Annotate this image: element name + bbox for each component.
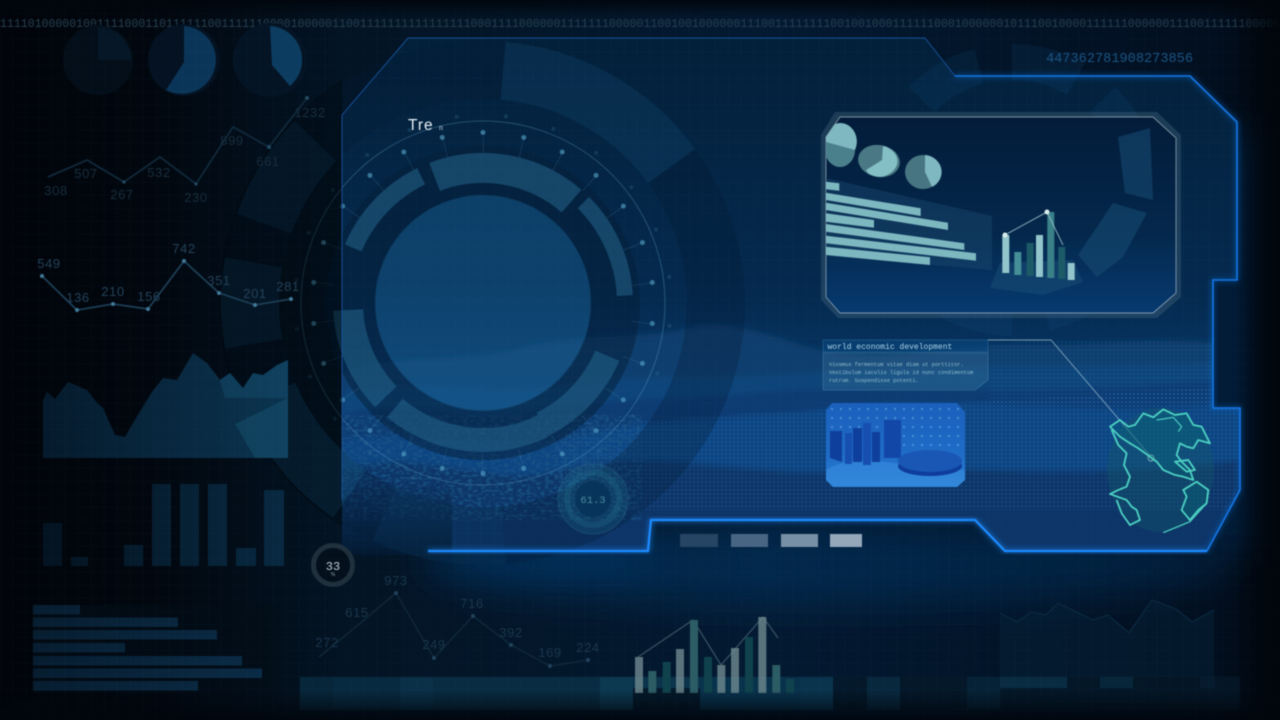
gauge 33 percent: 33 (326, 560, 340, 574)
line chart 1: 267 (110, 187, 134, 202)
dial dots (312, 132, 654, 474)
monitor combo chart (1002, 210, 1075, 280)
line chart 1: 1232 (294, 105, 326, 120)
line chart 1: 230 (184, 190, 208, 205)
binary string: 11110100000100111100011011111100111111000010000011001111111111111111000111100000011111110000011001001000000111001111111100100100011111100010000001011100100001111110000001110011111100000 (0, 18, 1280, 31)
line chart 1: 899 (220, 133, 244, 148)
line chart 1: 507 (74, 166, 98, 181)
line chart 3 (315, 573, 600, 668)
monitor panel (821, 112, 1181, 318)
monitor bars (826, 182, 976, 265)
gauge 61.3 (558, 464, 628, 534)
dial centre disc (375, 195, 591, 411)
globe continents (1110, 409, 1210, 533)
panel bottom-left fade (342, 480, 452, 555)
line chart 2: 136 (66, 290, 90, 305)
pie 2 (148, 24, 220, 96)
monitor outer bezel (821, 112, 1181, 318)
circular hud dial (273, 93, 693, 513)
line chart 3: 249 (422, 637, 446, 652)
bottom mosaic strip (300, 677, 1240, 710)
line chart 3: 716 (460, 596, 484, 611)
terrain waves (342, 326, 1240, 520)
monitor ring segments (990, 128, 1153, 295)
line chart 2: 549 (37, 256, 61, 271)
ring dim overlay outside panel (220, 82, 342, 525)
line chart 2: 351 (207, 273, 231, 288)
callout text: rutrum. Suspendisse potenti. (829, 378, 919, 384)
line chart 2: 742 (172, 241, 196, 256)
small level bars (680, 534, 862, 547)
3d pie disc (898, 464, 962, 476)
panel: main hud frame fill (342, 38, 1240, 551)
line chart 3: 169 (538, 645, 562, 660)
pie chart row (63, 23, 307, 97)
frame: glowing right and top-right edge (955, 76, 1240, 551)
callout text (829, 362, 973, 384)
3d chart image (825, 403, 966, 488)
dial outer dots (273, 93, 693, 513)
callout body (823, 353, 988, 390)
pie 3 (233, 23, 307, 97)
line chart 2: 201 (243, 286, 267, 301)
ambient glow under frame (420, 130, 1248, 605)
trend label: n (439, 125, 443, 132)
line chart 3: 392 (499, 625, 523, 640)
monitor bars track (826, 178, 992, 270)
line chart 1: 308 (44, 183, 68, 198)
callout heading bar (823, 340, 988, 352)
globe disc (1107, 408, 1214, 532)
area chart (43, 353, 288, 458)
line chart 1: 661 (256, 154, 280, 169)
gauge 33 percent: % (331, 572, 336, 578)
line chart 2 (37, 241, 300, 312)
callout: world economic development (823, 340, 988, 390)
right area chart (1000, 600, 1214, 677)
bar chart (43, 484, 284, 566)
lower centre combo chart (635, 617, 794, 693)
frame: thin top and left edge (342, 38, 955, 500)
connector line to globe (988, 340, 1154, 461)
dial spokes (323, 143, 643, 463)
dial segments (282, 102, 684, 504)
dial dark band (351, 171, 615, 435)
line chart 3: 615 (345, 605, 369, 620)
line chart 1: 532 (147, 165, 171, 180)
gauge 61.3: 61.3 (580, 495, 606, 507)
line chart 1 (44, 96, 326, 205)
serial number: 447362781908273856 (1046, 52, 1193, 67)
callout heading: world economic development (828, 343, 952, 352)
monitor screen (826, 117, 1176, 313)
line chart 3: 224 (576, 640, 600, 655)
trend label: Tre (408, 117, 434, 134)
callout text: Vivamus fermentum vitae diam ut porttitor. (829, 362, 964, 368)
circular background ring behind monitor (884, 62, 1140, 318)
3d bars (830, 420, 901, 465)
line chart 2: 210 (101, 284, 125, 299)
frame: glowing bottom edge (428, 520, 1207, 551)
line chart 2: 281 (276, 279, 300, 294)
dial thin outer circle (301, 121, 665, 485)
line chart 3: 272 (315, 635, 339, 650)
line chart 2: 156 (137, 289, 161, 304)
gauge 33 percent (314, 546, 352, 584)
globe (1107, 408, 1214, 533)
line chart 3: 973 (384, 573, 408, 588)
monitor pie charts (825, 123, 942, 189)
callout text: Vestibulum iaculis ligula id nunc condimentum (829, 370, 973, 376)
pie 1 (63, 25, 133, 95)
horizontal bar chart (33, 605, 283, 693)
big outer ring (158, 0, 808, 628)
